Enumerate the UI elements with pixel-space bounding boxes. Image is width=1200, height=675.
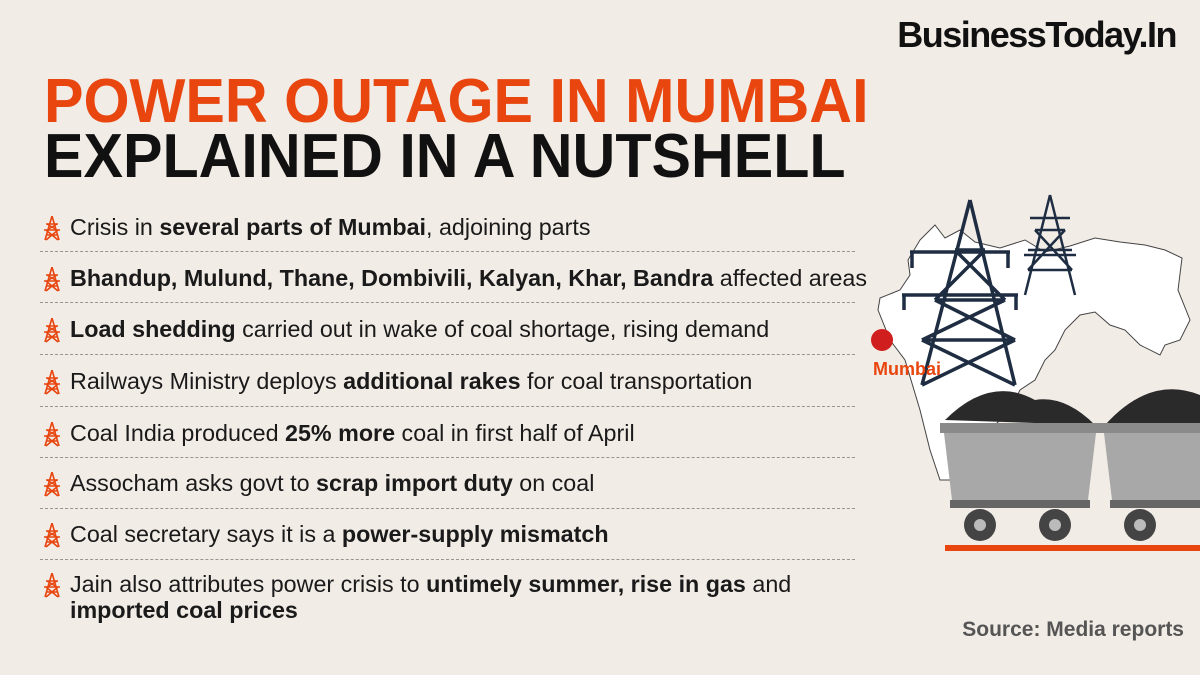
brand logo: BusinessToday.In — [897, 14, 1176, 55]
bullet 1: Crisis in several parts of Mumbai, adjoining parts — [70, 214, 591, 240]
bullet 5: Coal India produced 25% more coal in first half of April — [70, 420, 635, 446]
Mumbai marker: Mumbai — [873, 359, 941, 379]
icon: large tower — [902, 200, 1018, 385]
title line 1: POWER OUTAGE IN MUMBAI — [44, 67, 869, 136]
title line 2: EXPLAINED IN A NUTSHELL — [44, 122, 846, 191]
bullet 2: Bhandup, Mulund, Thane, Dombivili, Kalyan, Khar, Bandra affected areas — [70, 265, 867, 291]
bullet 6: Assocham asks govt to scrap import duty on coal — [70, 470, 594, 496]
bullet 4: Railways Ministry deploys additional rakes for coal transportation — [70, 368, 752, 394]
bullet 7: Coal secretary says it is a power-supply mismatch — [70, 521, 609, 547]
coal wagons — [940, 389, 1200, 551]
bullet 3: Load shedding carried out in wake of coal shortage, rising demand — [70, 316, 769, 342]
bullet 8: imported coal prices — [70, 597, 298, 623]
icon: small tower — [1024, 195, 1076, 295]
Mumbai marker — [871, 329, 941, 379]
illustration: map, towers, coal train — [871, 194, 1200, 551]
bullet 8 — [44, 571, 791, 623]
source: Source: Media reports — [962, 618, 1184, 641]
bullet 8: Jain also attributes power crisis to untimely summer, rise in gas and — [70, 571, 791, 597]
map of Maharashtra — [878, 225, 1190, 480]
